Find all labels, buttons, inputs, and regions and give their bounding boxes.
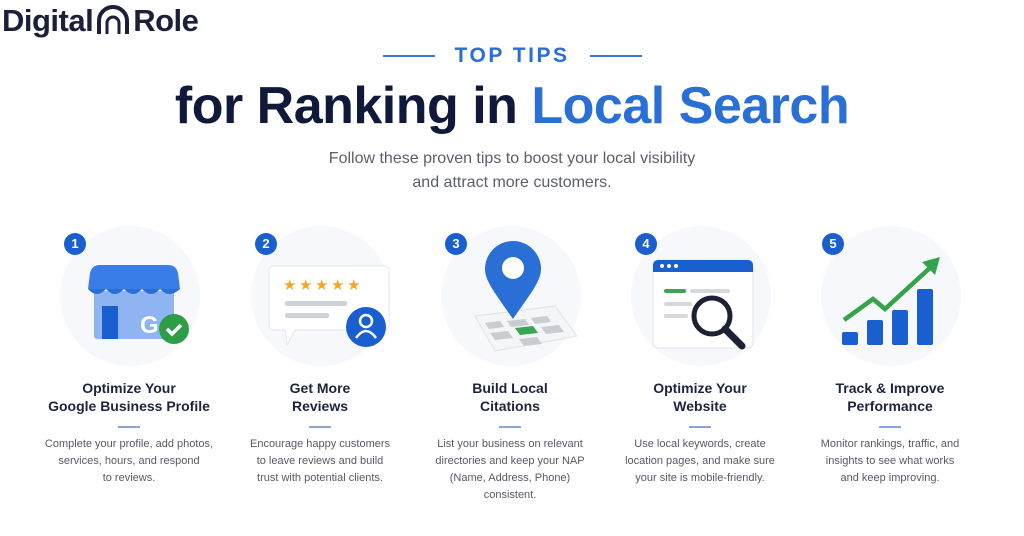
text 4 bbox=[625, 438, 775, 484]
badge 2: 2 bbox=[262, 236, 270, 251]
text 1: Complete your profile, add photos, bbox=[45, 438, 213, 450]
badge 5: 5 bbox=[829, 236, 837, 251]
icon: review bubble: ★ bbox=[331, 276, 344, 294]
panel 1 bbox=[45, 226, 213, 484]
icon: review bubble: ★ bbox=[315, 276, 328, 294]
icon: growth chart bbox=[842, 257, 940, 345]
badge 4: 4 bbox=[642, 236, 650, 251]
badge 3 bbox=[445, 233, 467, 255]
icon: storefront bbox=[88, 265, 189, 344]
icon: review bubble: ★ bbox=[299, 276, 312, 294]
panel 3 bbox=[435, 226, 585, 501]
icon: storefront: G bbox=[140, 312, 159, 339]
logo: Digital Role bbox=[2, 3, 198, 38]
heading 5: Performance bbox=[847, 398, 933, 414]
heading 2: Reviews bbox=[292, 398, 348, 414]
subtitle bbox=[329, 150, 696, 191]
panel 2 bbox=[250, 226, 391, 484]
text 4: your site is mobile-friendly. bbox=[635, 472, 765, 484]
badge 1 bbox=[64, 233, 86, 255]
text 5 bbox=[821, 438, 959, 484]
badge 1: 1 bbox=[71, 236, 79, 251]
heading 2: Get More bbox=[290, 380, 350, 396]
badge 4 bbox=[635, 233, 657, 255]
heading 1: Optimize Your bbox=[82, 380, 176, 396]
heading 2 bbox=[290, 380, 350, 414]
icon: review bubble bbox=[268, 266, 390, 347]
heading 3 bbox=[472, 380, 548, 414]
heading 1 bbox=[48, 380, 210, 414]
heading 5: Track & Improve bbox=[836, 380, 944, 396]
text 4: location pages, and make sure bbox=[625, 455, 775, 467]
text 1: services, hours, and respond bbox=[58, 455, 200, 467]
title: for Ranking in Local Search bbox=[175, 77, 849, 135]
panel 5 bbox=[821, 226, 961, 484]
text 3: List your business on relevant bbox=[437, 438, 583, 450]
badge 3: 3 bbox=[452, 236, 460, 251]
subtitle: and attract more customers. bbox=[412, 174, 612, 191]
text 4: Use local keywords, create bbox=[634, 438, 766, 450]
text 2: to leave reviews and build bbox=[257, 455, 383, 467]
icon: browser search bbox=[652, 260, 754, 350]
subtitle: Follow these proven tips to boost your local visibility bbox=[329, 150, 695, 167]
text 2: trust with potential clients. bbox=[257, 472, 383, 484]
heading 3: Citations bbox=[480, 398, 540, 414]
text 3: consistent. bbox=[484, 489, 536, 501]
text 3: (Name, Address, Phone) bbox=[450, 472, 570, 484]
heading 4: Optimize Your bbox=[653, 380, 747, 396]
text 2 bbox=[250, 438, 390, 484]
heading 3: Build Local bbox=[472, 380, 548, 396]
text 1: to reviews. bbox=[103, 472, 155, 484]
heading 1: Google Business Profile bbox=[48, 398, 210, 414]
heading 4 bbox=[653, 380, 747, 414]
icon: review bubble: ★ bbox=[283, 276, 296, 294]
badge 2 bbox=[255, 233, 277, 255]
panel 4 bbox=[625, 226, 775, 484]
text 2: Encourage happy customers bbox=[250, 438, 390, 450]
badge 5 bbox=[822, 233, 844, 255]
eyebrow: TOP TIPS: TOP TIPS bbox=[455, 44, 569, 67]
heading 5 bbox=[836, 380, 944, 414]
text 5: Monitor rankings, traffic, and bbox=[821, 438, 959, 450]
text 3: directories and keep your NAP bbox=[435, 455, 585, 467]
heading 4: Website bbox=[673, 398, 727, 414]
icon: review bubble: ★ bbox=[347, 276, 360, 294]
text 3 bbox=[435, 438, 585, 501]
icon: map pin bbox=[474, 241, 578, 352]
text 5: insights to see what works bbox=[826, 455, 954, 467]
text 5: and keep improving. bbox=[840, 472, 940, 484]
text 1 bbox=[45, 438, 213, 484]
